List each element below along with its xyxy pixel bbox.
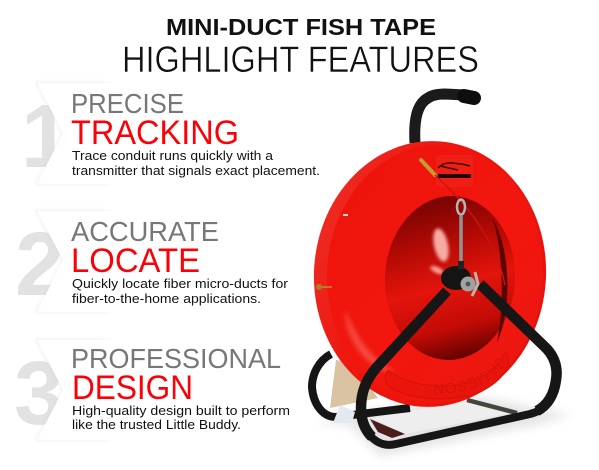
canvas pouch — [330, 360, 378, 408]
inner bowl — [381, 193, 519, 363]
heading 3: PROFESSIONAL — [71, 343, 281, 374]
body 2: Quickly locate fiber micro-ducts for — [72, 276, 289, 291]
feature 1: precise tracking — [21, 78, 320, 190]
numeral 1: 1 — [21, 87, 71, 187]
numeral 2: 2 — [15, 215, 65, 315]
chevron 3 — [37, 335, 118, 445]
chevron 2 — [37, 206, 118, 318]
reel rim — [305, 133, 555, 415]
feature 2: accurate locate: LOCATE — [71, 242, 200, 280]
rear crossbar — [467, 400, 517, 413]
heading 1: PRECISE — [71, 88, 184, 119]
title — [122, 14, 479, 80]
front stand — [361, 284, 557, 445]
floor panel — [372, 400, 516, 434]
hub — [441, 261, 478, 296]
reel face — [318, 138, 552, 410]
feature 1: precise tracking: TRACKING — [71, 114, 239, 152]
brass tip and wire — [421, 160, 435, 175]
side fittings — [316, 214, 348, 290]
heading 2: ACCURATE — [71, 216, 219, 247]
floor reflection — [370, 419, 405, 438]
numeral 3: 3 — [14, 344, 64, 444]
body 1: Trace conduit runs quickly with a — [72, 148, 274, 163]
title: MINI-DUCT FISH TAPE — [166, 14, 436, 40]
eye bolt — [457, 200, 465, 264]
feature 3: professional design: like the trusted Little Buddy. — [72, 417, 241, 432]
floor shadow — [315, 395, 572, 456]
embossed plate: JAMESON — [434, 358, 504, 394]
body 3: High-quality design built to perform — [72, 403, 290, 418]
label — [436, 155, 473, 187]
title: HIGHLIGHT FEATURES — [122, 39, 479, 80]
product photo: fish tape reel — [308, 88, 564, 458]
bowl highlights — [429, 227, 451, 276]
handle — [415, 94, 465, 143]
back stand — [312, 354, 410, 417]
bowl right shadow — [492, 218, 507, 342]
embossed plate — [384, 351, 509, 400]
feature 2: accurate locate: fiber-to-the-home applications. — [72, 291, 261, 306]
white tag — [333, 405, 355, 423]
feature 2: accurate locate — [15, 206, 289, 318]
face highlight — [345, 310, 395, 372]
feature 1: precise tracking: transmitter that signals exact placement. — [72, 163, 320, 178]
feature 3: professional design: DESIGN — [72, 369, 193, 407]
chevron 1 — [37, 78, 118, 190]
feature 3: professional design — [14, 335, 290, 445]
